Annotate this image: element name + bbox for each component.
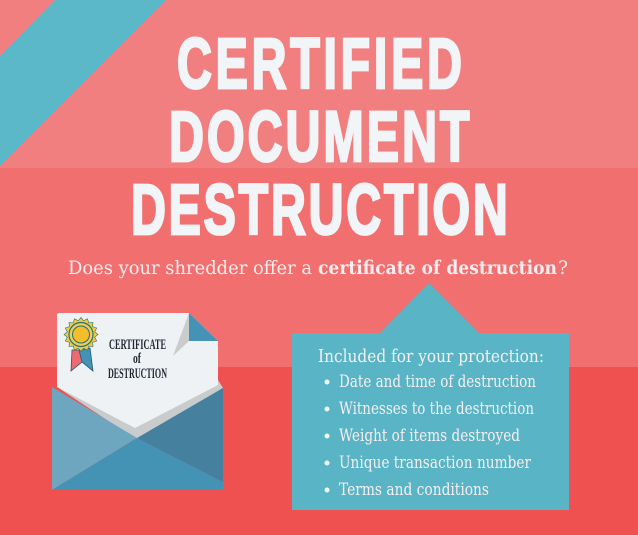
envelope left flap (52, 387, 137, 490)
list: Terms and conditions (339, 480, 489, 499)
certificate paper (57, 313, 218, 428)
list: Unique transaction number (339, 453, 531, 472)
title: CERTIFIED (177, 24, 462, 103)
callout box (292, 283, 569, 510)
list: Witnesses to the destruction (339, 399, 534, 418)
paper fold shadow (173, 313, 189, 356)
diagonal teal stripe (0, 0, 166, 166)
certificate text: of (133, 351, 142, 367)
certificate text: DESTRUCTION (108, 366, 167, 382)
list: Weight of items destroyed (339, 426, 520, 445)
certificate text (108, 337, 167, 382)
illustration: envelope with certificate (52, 313, 223, 490)
background bottom band (0, 367, 638, 535)
certificate text: CERTIFICATE (109, 337, 166, 353)
subtitle (68, 257, 568, 279)
subtitle: Does your shredder offer a (68, 257, 312, 279)
title (131, 24, 508, 249)
envelope back shadow (57, 380, 223, 440)
title: DESTRUCTION (131, 170, 508, 249)
envelope right flap (137, 388, 223, 482)
subtitle: ? (558, 257, 568, 279)
callout heading: Included for your protection: (318, 346, 544, 367)
background top band (0, 0, 638, 168)
list: Date and time of destruction (339, 372, 536, 391)
subtitle: certificate of destruction (318, 257, 557, 279)
paper fold (189, 313, 218, 341)
envelope bottom (52, 438, 223, 490)
list (324, 372, 536, 499)
title: DOCUMENT (169, 97, 470, 176)
background middle band (0, 168, 638, 367)
icon: award ribbon (64, 318, 98, 371)
callout shape (292, 283, 569, 510)
